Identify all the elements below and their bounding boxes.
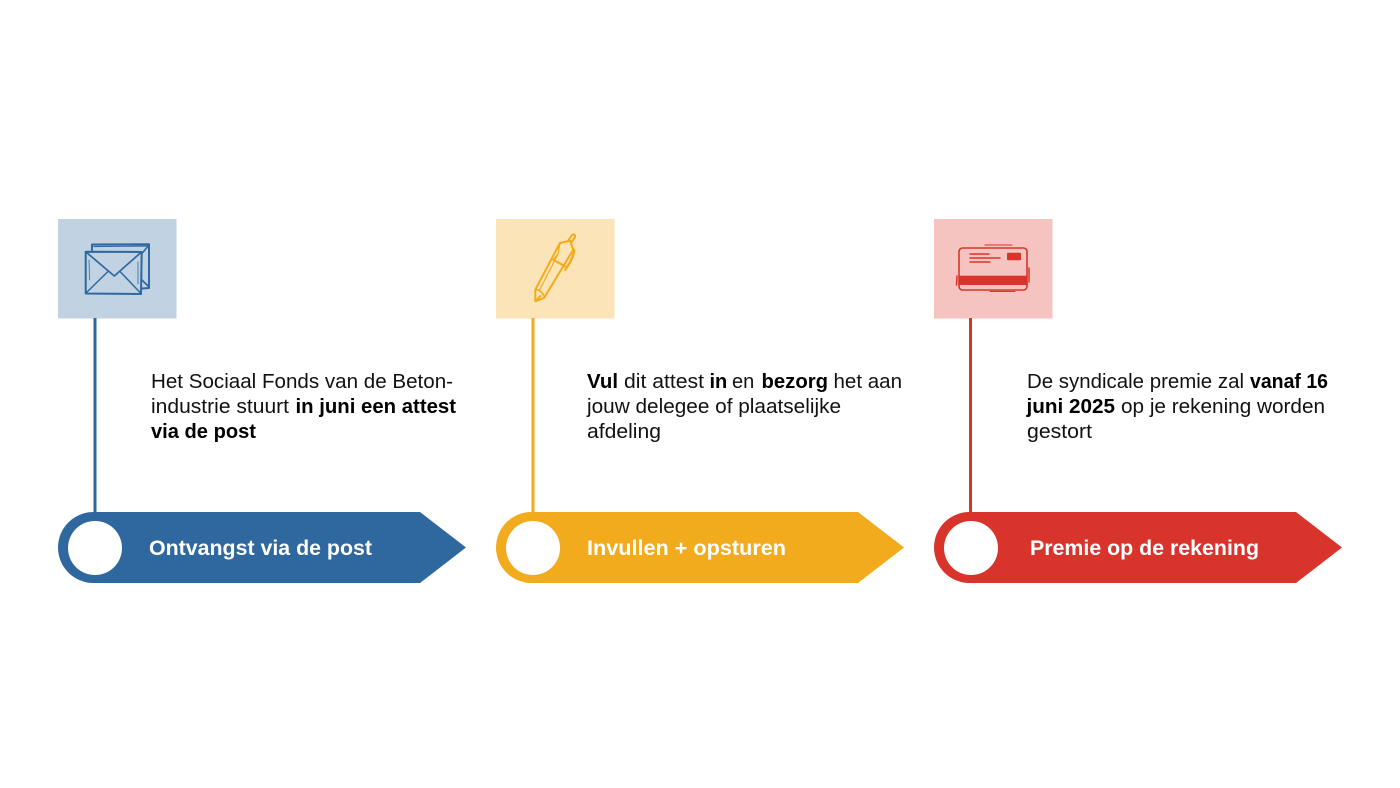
connector line: [969, 318, 972, 513]
arrow banner: [934, 512, 1342, 583]
connector line: [532, 318, 534, 513]
body text: via de post: [151, 421, 256, 443]
body text: De syndicale premie zal: [1027, 371, 1244, 393]
arrow banner: Ontvangst via de post: [149, 537, 372, 560]
body text: bezorg: [762, 371, 828, 393]
body text: [1025, 371, 1328, 443]
panel: step 1 ontvangst via de post: [58, 219, 466, 583]
body text: dit attest: [624, 371, 704, 393]
body text: vanaf 16: [1250, 371, 1328, 393]
body text: en: [732, 371, 754, 393]
body text: afdeling: [587, 421, 661, 443]
arrow banner: [58, 512, 466, 583]
arrow banner: [496, 512, 904, 583]
icon box: bank card: [934, 219, 1052, 318]
body text: het aan: [834, 371, 902, 393]
body text: industrie stuurt: [151, 396, 289, 418]
arrow banner: Invullen + opsturen: [587, 537, 786, 560]
body text: op je rekening worden: [1121, 396, 1325, 418]
body text: [151, 371, 456, 443]
body text: in: [710, 371, 727, 393]
arrow banner: Premie op de rekening: [1030, 537, 1259, 560]
icon box: pen: [496, 219, 614, 318]
body text: [586, 371, 902, 443]
body text: jouw delegee of plaatselijke: [586, 396, 841, 418]
body text: in juni een attest: [296, 396, 456, 418]
panel: step 2 invullen en opsturen: [496, 219, 904, 583]
body text: Het Sociaal Fonds van de Beton-: [151, 371, 453, 393]
body text: juni 2025: [1025, 396, 1115, 418]
body text: Vul: [587, 371, 618, 393]
connector line: [94, 318, 96, 513]
icon box: envelopes: [58, 219, 176, 318]
body text: gestort: [1027, 421, 1092, 443]
panel: step 3 premie op de rekening: [934, 219, 1342, 583]
